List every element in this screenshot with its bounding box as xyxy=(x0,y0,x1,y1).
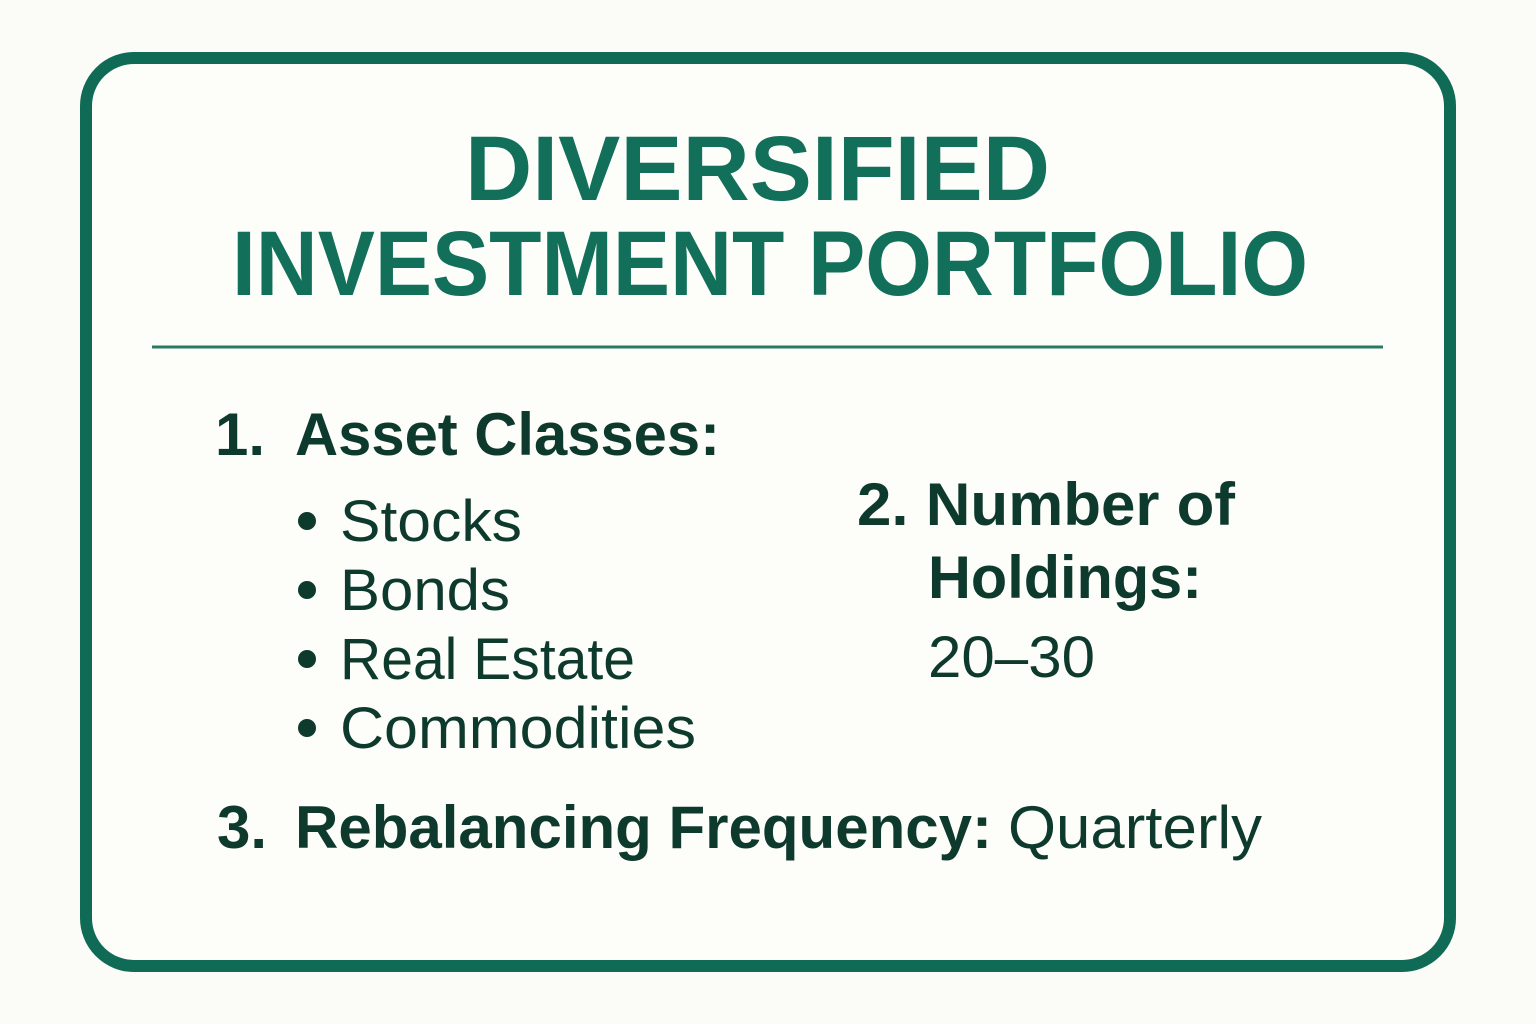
section: asset classes: Asset Classes: xyxy=(295,401,720,468)
bullet list: Commodities xyxy=(340,696,696,761)
bullet list: Stocks xyxy=(340,489,522,554)
bullet list: Real Estate xyxy=(340,627,635,692)
title xyxy=(232,118,1308,315)
title: DIVERSIFIED xyxy=(465,118,1050,220)
section: number of holdings: 20–30 xyxy=(928,625,1095,690)
bullet list: Bonds xyxy=(340,558,510,623)
title: INVESTMENT PORTFOLIO xyxy=(232,213,1308,315)
section: number of holdings: Holdings: xyxy=(928,544,1202,611)
section: rebalancing frequency xyxy=(217,794,1262,861)
section: rebalancing frequency: 3. xyxy=(217,794,267,861)
section: rebalancing frequency: Quarterly xyxy=(1008,794,1262,861)
section: rebalancing frequency: Rebalancing Frequency: xyxy=(295,794,992,861)
section: asset classes xyxy=(215,401,720,761)
section: asset classes: 1. xyxy=(215,401,265,468)
panel: frame xyxy=(86,58,1450,966)
section: number of holdings xyxy=(857,471,1236,690)
bullet list xyxy=(298,489,696,761)
section: number of holdings: 2. Number of xyxy=(857,471,1236,538)
